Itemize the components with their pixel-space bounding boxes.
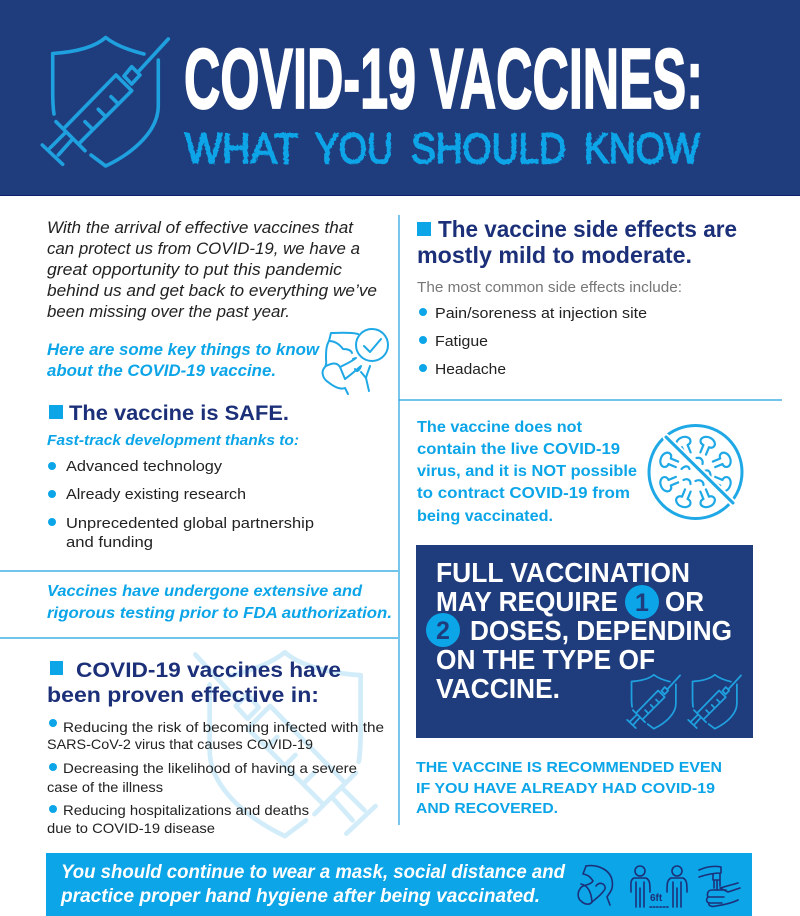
- box text: ON THE TYPE OF: [436, 644, 655, 675]
- column divider: [0, 215, 782, 825]
- callout: no live virus: being vaccinated.: [417, 508, 553, 525]
- icon: crossed out virus: [649, 426, 742, 518]
- callout: recommended: AND RECOVERED.: [416, 801, 558, 817]
- subtitle: YOU: [315, 125, 393, 173]
- heading: side effects: [417, 216, 737, 268]
- callout: recommended: [416, 760, 722, 817]
- icon: mask: [578, 866, 612, 905]
- heading: side effects: mostly mild to moderate.: [417, 242, 692, 268]
- subtitle: SHOULD: [411, 125, 566, 173]
- box text: MAY REQUIRE: [436, 586, 618, 617]
- icon: six feet distance: 6ft: [650, 893, 663, 904]
- icon: six feet distance: [631, 866, 687, 907]
- heading: safe: The vaccine is SAFE.: [69, 402, 289, 425]
- panel: proven effective: [47, 658, 384, 836]
- subheading: Fast-track development thanks to:: [47, 432, 299, 449]
- side effects list: [419, 305, 647, 378]
- side effects intro: The most common side effects include:: [417, 279, 682, 296]
- callout: no live virus: [417, 419, 637, 525]
- bullet list: Already existing research: [66, 486, 246, 503]
- effectiveness list: SARS-CoV-2 virus that causes COVID-19: [47, 736, 313, 752]
- number badge 1: [625, 585, 659, 619]
- heading: effective: been proven effective in:: [47, 683, 319, 707]
- header banner: [0, 0, 800, 196]
- panel: intro text: can protect us from COVID-19, we have a: [47, 240, 360, 258]
- panel: side effects: [417, 216, 737, 378]
- panel: intro text: With the arrival of effective vaccines that: [47, 219, 354, 237]
- box text: VACCINE.: [436, 673, 560, 704]
- effectiveness list: [47, 719, 384, 836]
- effectiveness list: due to COVID-19 disease: [47, 820, 215, 836]
- side effects list: Headache: [435, 361, 506, 378]
- callout: testing: [47, 583, 392, 622]
- key things callout: about the COVID-19 vaccine.: [47, 362, 276, 380]
- panel: intro text: behind us and get back to everything we’ve: [47, 282, 377, 300]
- key things callout: Here are some key things to know: [47, 341, 320, 359]
- number badge 2: 2: [436, 617, 450, 645]
- side effects list: Pain/soreness at injection site: [435, 305, 647, 322]
- icon: face with mask and check: [323, 329, 388, 394]
- callout: no live virus: virus, and it is NOT possible: [417, 463, 637, 480]
- callout: testing: Vaccines have undergone extensive and: [47, 583, 363, 600]
- icon: watermark shield with syringe: [195, 652, 376, 836]
- callout: recommended: IF YOU HAVE ALREADY HAD COVID-19: [416, 781, 715, 797]
- subtitle: KNOW: [584, 125, 700, 173]
- effectiveness list: Reducing hospitalizations and deaths: [63, 802, 309, 818]
- subtitle: [185, 125, 700, 173]
- banner text: You should continue to wear a mask, social distance and: [61, 861, 566, 883]
- panel: full vaccination box: [416, 545, 753, 738]
- box text: [436, 557, 732, 704]
- panel: intro text: been missing over the past year.: [47, 303, 290, 321]
- box text: FULL VACCINATION: [436, 557, 690, 588]
- panel: bottom banner: [46, 853, 752, 916]
- panel: intro text: great opportunity to put this pandemic: [47, 261, 343, 279]
- box text: OR: [665, 586, 704, 617]
- key things callout: [47, 341, 320, 380]
- number badge 1: 1: [635, 589, 649, 617]
- callout: no live virus: The vaccine does not: [417, 419, 583, 436]
- icon: shield with syringe: [42, 38, 168, 166]
- banner text: practice proper hand hygiene after being vaccinated.: [60, 885, 540, 907]
- effectiveness list: case of the illness: [47, 779, 163, 795]
- effectiveness list: Decreasing the likelihood of having a severe: [63, 760, 357, 776]
- callout: no live virus: contain the live COVID-19: [417, 441, 620, 458]
- heading: effective: [47, 658, 341, 707]
- callout: recommended: THE VACCINE IS RECOMMENDED EVEN: [416, 760, 722, 776]
- heading: side effects: The vaccine side effects are: [438, 216, 737, 242]
- box text: DOSES, DEPENDING: [470, 615, 732, 646]
- icon: shield with syringe small 1: [627, 675, 680, 729]
- callout: no live virus: to contract COVID-19 from: [417, 485, 630, 502]
- callout: testing: rigorous testing prior to FDA authorization.: [47, 605, 392, 622]
- icon: shield with syringe small 2: [688, 675, 741, 729]
- bullet list: and funding: [66, 534, 153, 551]
- panel: the vaccine is safe: [47, 402, 314, 551]
- banner text: [60, 861, 566, 907]
- bullet list: [48, 458, 314, 551]
- side effects list: Fatigue: [435, 333, 488, 350]
- bullet list: Unprecedented global partnership: [66, 515, 314, 532]
- heading: effective: COVID-19 vaccines have: [76, 658, 341, 682]
- effectiveness list: Reducing the risk of becoming infected with the: [63, 719, 384, 735]
- bullet list: Advanced technology: [66, 458, 223, 475]
- panel: intro text: [47, 219, 377, 321]
- icon: hand washing: [699, 866, 740, 906]
- subtitle: WHAT: [185, 125, 298, 173]
- number badge 2: [426, 613, 460, 647]
